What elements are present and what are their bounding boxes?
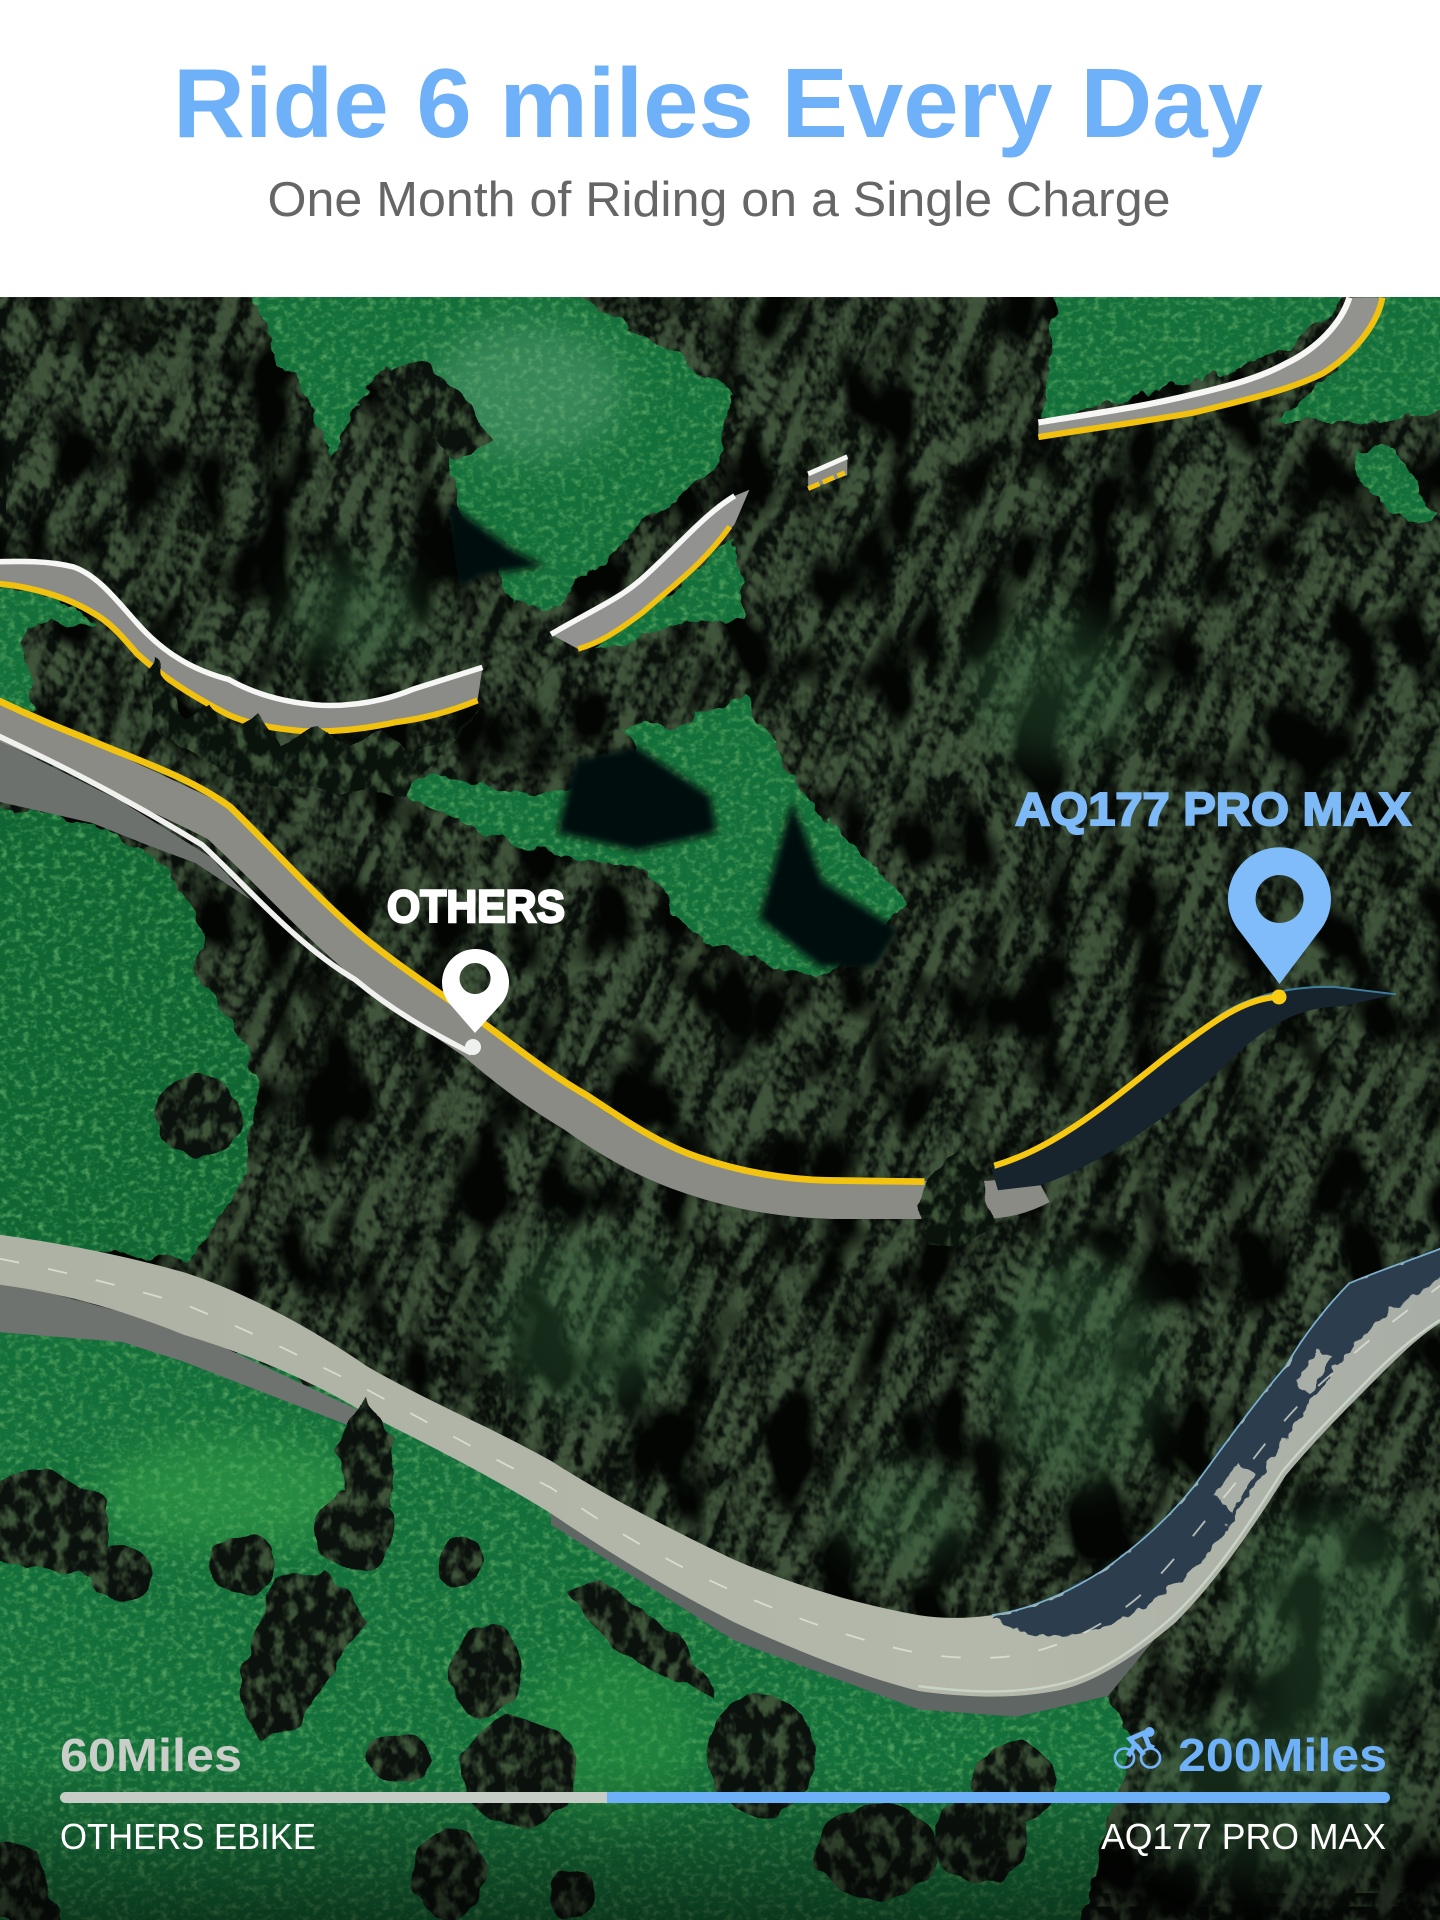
road 3: retaining wall left: [0, 1280, 367, 1433]
shadow: top meadow: [447, 502, 545, 588]
meadow: top centre: [247, 276, 735, 612]
patch: lower forest centre: [839, 1469, 973, 1567]
others distance value: 60Miles: [60, 1729, 242, 1781]
road 1: left white edge: [0, 561, 482, 705]
bush: [936, 1795, 1029, 1883]
road 1: short piece yellow: [808, 473, 845, 489]
front wheel: [1141, 1748, 1160, 1768]
trees over road 1: [144, 655, 484, 796]
aq177 distance value: 200Miles: [1178, 1729, 1387, 1781]
rear wheel: [1115, 1748, 1134, 1768]
others bar caption: OTHERS EBIKE: [60, 1816, 316, 1857]
road 1: middle white edge: [551, 496, 735, 634]
road 1: right surface: [1038, 298, 1382, 437]
meadow: right patch: [1353, 447, 1433, 527]
bush: [413, 1827, 486, 1920]
road 1: left surface: [0, 561, 482, 731]
road 1: short visible piece: [808, 456, 847, 490]
shadow: spruce tree: [759, 802, 900, 967]
bush: left meadow: [156, 1075, 241, 1158]
road 2: retaining wall: [0, 741, 251, 900]
bush: [550, 1871, 596, 1920]
bush: top meadow: [386, 361, 492, 459]
icon: blue map pin: [1228, 847, 1331, 984]
large bush: [239, 1570, 367, 1742]
patch: upper left forest: [288, 557, 422, 667]
bright grass highlights: [98, 324, 698, 1824]
shadow: centre meadow: [557, 747, 716, 851]
bush: [436, 1536, 482, 1589]
road 1: middle yellow edge: [578, 527, 730, 649]
bush row: [569, 1581, 716, 1696]
patch: lower forest: [992, 1255, 1163, 1488]
meadow: left sliver: [0, 585, 96, 710]
bush: [316, 1491, 394, 1570]
road 3: lane dashes: [0, 1259, 1440, 1658]
bush: [449, 1626, 523, 1717]
comparison bar panel: [60, 1727, 1390, 1857]
bush: [972, 1742, 1056, 1821]
highlight: bottom meadow: [98, 1439, 367, 1549]
rider body: [1128, 1733, 1154, 1756]
bush: [367, 1731, 431, 1785]
bar: others segment: [60, 1792, 607, 1803]
patch: right forest: [967, 612, 1139, 759]
road 1: short piece white: [808, 457, 847, 474]
label: others: OTHERS: [387, 881, 565, 932]
road 3: shaded lane: [992, 1243, 1440, 1636]
highlight: top meadow: [429, 324, 624, 459]
bottom darkening: [0, 1763, 1440, 1920]
meadow: left: [0, 802, 257, 1261]
road 2: white edge: [0, 731, 471, 1053]
road 2: aq177 route yellow: [994, 997, 1280, 1166]
road 2: others route yellow: [0, 696, 924, 1182]
road 3: surface: [0, 1233, 1440, 1697]
meadow: bottom: [0, 1322, 1133, 1920]
title: Ride 6 miles Every Day: [173, 48, 1263, 158]
road 3: pale edge line: [918, 1320, 1440, 1691]
bar: aq177 segment: [607, 1792, 1390, 1803]
road 3: blue shoulder line: [992, 1249, 1440, 1615]
road 1: right yellow edge: [1038, 298, 1382, 437]
corner: [0, 1832, 61, 1920]
bush: [209, 1533, 276, 1597]
icon: white map pin: [442, 949, 509, 1033]
highlight: bottom meadow centre: [527, 1653, 698, 1824]
patch: bottom right lower: [1139, 1714, 1408, 1886]
meadow: centre: [376, 694, 909, 976]
page background: [0, 0, 1440, 297]
end dot of others route: [465, 1039, 481, 1055]
bush: [708, 1695, 816, 1817]
rider head: [1144, 1727, 1154, 1737]
aq177 bar caption: AQ177 PRO MAX: [1101, 1816, 1386, 1857]
road 1: right white edge: [1038, 298, 1349, 422]
road 3: retaining wall right: [551, 1509, 1163, 1717]
meadow: top right: [1038, 276, 1341, 422]
road 1: left yellow edge: [0, 583, 478, 731]
lighter tree patches: [288, 557, 1433, 1886]
road 1: middle surface: [551, 490, 749, 649]
dark bushes and trees on grass: [0, 361, 1056, 1920]
bush: [816, 1804, 938, 1899]
patch: bottom right: [1237, 1506, 1433, 1727]
bush: [460, 1717, 578, 1827]
tall tree by road: [336, 1397, 394, 1506]
end dot of aq177 route: [1272, 990, 1286, 1004]
road 2: surface: [0, 715, 1041, 1200]
label: aq177 pro max: AQ177 PRO MAX: [1015, 783, 1411, 835]
tree shadows on meadows: [447, 502, 900, 967]
road 2: blue edge: [994, 987, 1396, 1168]
patch: lower centre: [490, 1237, 686, 1408]
icon: cyclist: [1115, 1727, 1160, 1768]
road 2: dark end section: [992, 987, 1396, 1190]
trees over road 2: [916, 1147, 994, 1247]
subtitle: One Month of Riding on a Single Charge: [268, 173, 1170, 227]
bush: [92, 1547, 153, 1600]
road 3: sunlit gaps in shade: [1215, 1351, 1332, 1511]
bush group: left: [0, 1466, 110, 1573]
meadow: far right: [1273, 276, 1440, 422]
meadow: under road one: [596, 539, 743, 649]
